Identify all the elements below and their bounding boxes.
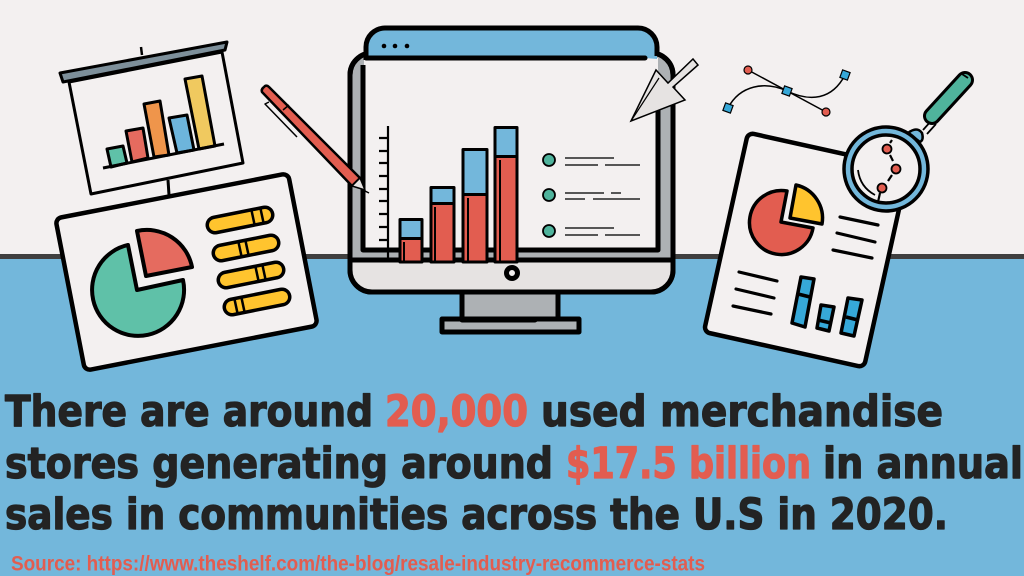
axis	[379, 126, 388, 262]
panel: pie chart card	[55, 173, 318, 371]
bar chart: monitor stacked bars	[400, 128, 517, 262]
headline text	[5, 387, 1023, 540]
headline text: $17.5 billion	[566, 439, 811, 489]
legend: dots and text lines	[543, 154, 640, 237]
legend: yellow pills	[215, 209, 282, 313]
screen	[364, 58, 658, 250]
icon: magnifying glass	[844, 74, 968, 211]
chart: green and red pie	[92, 230, 192, 336]
headline text: stores generating around	[5, 439, 553, 489]
headline text: There are around	[5, 387, 373, 437]
text lines	[733, 217, 878, 314]
icon: pen	[262, 86, 369, 193]
icon: bezier curve	[723, 66, 850, 116]
camera button	[506, 268, 518, 278]
monitor body	[350, 53, 673, 292]
panel: report document	[704, 133, 908, 367]
headline text: used merchandise	[541, 387, 943, 437]
chart: report pie	[749, 185, 823, 255]
browser title bar	[366, 28, 657, 60]
bar chart: report bars	[792, 277, 862, 336]
magnified line chart	[858, 140, 900, 202]
headline text: 20,000	[385, 387, 528, 437]
icon: cursor arrow	[631, 59, 698, 121]
panel: desktop monitor	[350, 28, 673, 332]
bar chart: presentation bars	[103, 76, 224, 168]
source citation: Source: https://www.theshelf.com/the-blog/resale-industry-recommerce-stats	[11, 552, 705, 576]
monitor stand	[442, 291, 579, 332]
panel: presentation screen with bar chart	[60, 42, 243, 195]
